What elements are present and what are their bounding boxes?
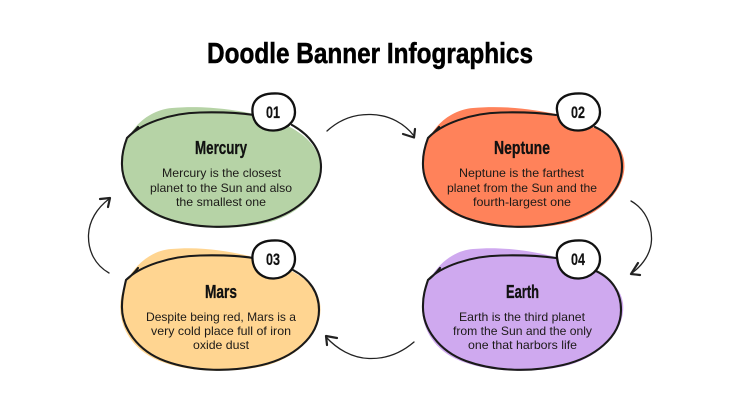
heading: Mercury: Mercury — [195, 138, 247, 158]
text: Neptune description — [447, 166, 597, 209]
badge: 02 — [557, 93, 600, 131]
arrow: Mercury to Neptune — [327, 114, 415, 138]
text: Earth description: Earth is the third planet — [459, 310, 586, 324]
text: Mars description: Despite being red, Mars is a — [146, 310, 296, 324]
blob outline: Mercury — [122, 112, 321, 227]
blob outline: Neptune — [423, 112, 622, 227]
badge: 04 — [557, 240, 600, 279]
text: Neptune description: fourth-largest one — [473, 195, 571, 209]
title: Doodle Banner Infographics — [207, 38, 533, 70]
badge: 02: 02 — [571, 103, 585, 122]
text: Earth description: from the Sun and the only — [453, 324, 592, 338]
text: Mars description: oxide dust — [193, 338, 250, 352]
text: Mercury description — [150, 166, 292, 209]
text: Neptune description: planet from the Sun and the — [447, 181, 597, 195]
panel: Mars — [120, 240, 320, 371]
panel: Mercury — [121, 93, 321, 228]
blob outline: Mars — [122, 255, 319, 370]
text: Mars description — [146, 310, 296, 352]
blob fill: Mars — [120, 248, 320, 371]
blob fill: Earth — [422, 248, 623, 371]
blob outline: Earth — [423, 255, 621, 370]
blob fill: Neptune — [422, 107, 624, 228]
badge: 01 — [252, 93, 295, 131]
badge: 03 — [252, 240, 295, 279]
badge: 04: 04 — [571, 250, 585, 269]
text: Mars description: very cold place full of iron — [151, 324, 291, 338]
badge: 03: 03 — [266, 250, 280, 269]
text: Earth description: one that harbors life — [468, 338, 577, 352]
text: Mercury description: planet to the Sun and also — [150, 181, 292, 195]
arrow: Earth to Mars — [326, 336, 414, 359]
panel: Earth — [422, 240, 623, 371]
blob fill: Mercury — [121, 107, 321, 228]
text: Mercury description: the smallest one — [176, 195, 266, 209]
text: Neptune description: Neptune is the farthest — [459, 166, 585, 180]
heading: Earth: Earth — [506, 282, 539, 302]
text: Mercury description: Mercury is the closest — [162, 166, 282, 180]
panel: Neptune — [422, 93, 624, 228]
arrow: Neptune to Earth — [631, 201, 652, 275]
text: Earth description — [453, 310, 592, 352]
heading: Mars: Mars — [205, 282, 237, 302]
badge: 01: 01 — [266, 103, 280, 122]
heading: Neptune: Neptune — [494, 138, 550, 158]
arrow: Mars to Mercury — [88, 198, 110, 273]
